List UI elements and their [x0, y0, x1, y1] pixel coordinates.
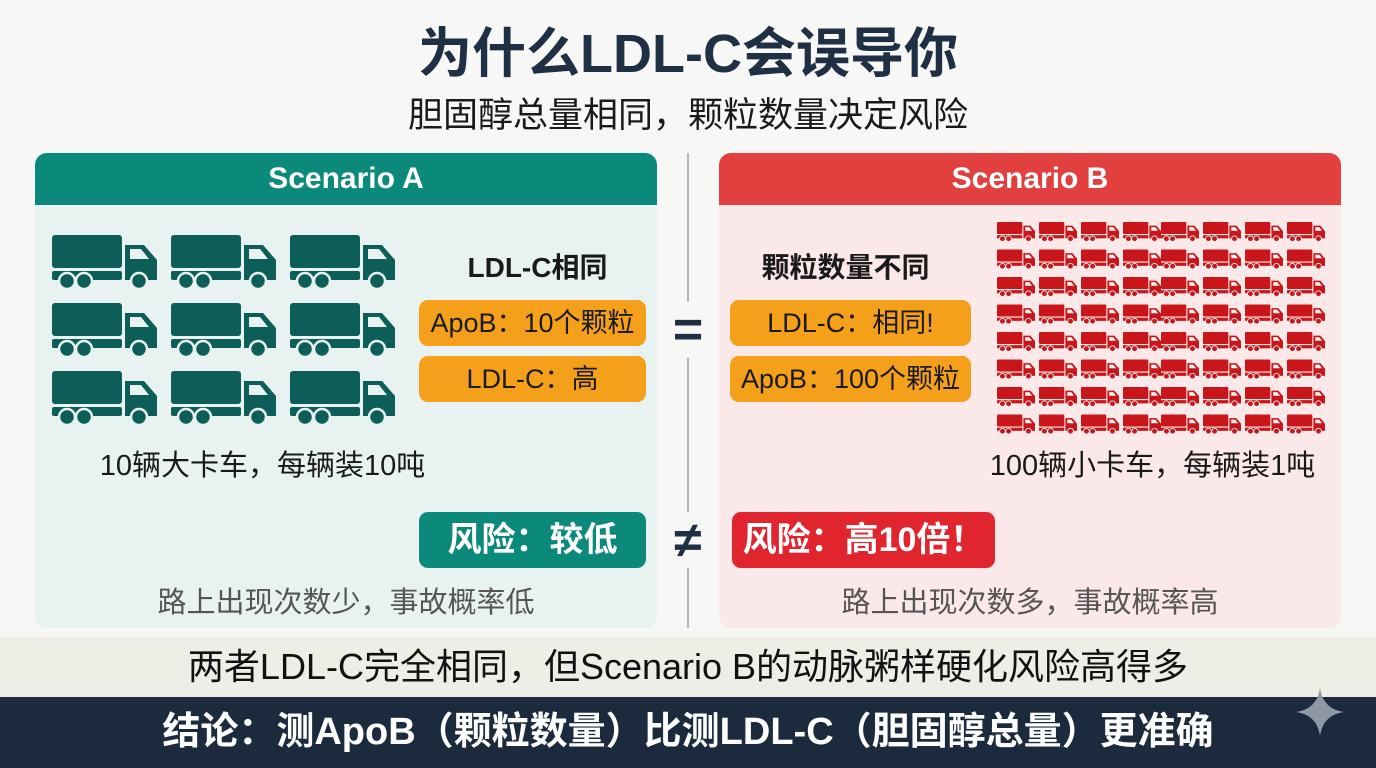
box: ApoB 10	[419, 300, 646, 346]
header: scenario B: Scenario B	[952, 162, 1108, 195]
subtitle: 胆固醇总量相同，颗粒数量决定风险	[408, 96, 968, 135]
icon: sparkle	[1296, 688, 1344, 736]
note B: 路上出现次数多，事故概率高	[841, 587, 1218, 619]
equals sign: =	[673, 301, 703, 359]
not equal sign: ≠	[674, 512, 702, 568]
icon grid: 64 small red trucks	[997, 222, 1325, 434]
box: LDL-C same	[730, 300, 971, 346]
caption B: 100辆小卡车，每辆装1吨	[990, 450, 1315, 482]
risk box A	[419, 512, 646, 568]
summary band	[0, 637, 1376, 697]
title: 为什么LDL-C会误导你	[418, 24, 958, 84]
box: ApoB 10: ApoB：10个颗粒	[430, 308, 635, 338]
note A: 路上出现次数少，事故概率低	[157, 587, 534, 619]
heading: LDL-C相同: LDL-C相同	[468, 252, 607, 283]
caption A: 10辆大卡车，每辆装10吨	[100, 450, 425, 482]
not equal sign	[663, 512, 713, 568]
conclusion footer	[0, 697, 1376, 768]
risk box B: 风险：高10倍！	[743, 521, 984, 559]
icon grid: 9 big trucks	[52, 235, 395, 424]
summary band: 两者LDL-C完全相同，但Scenario B的动脉粥样硬化风险高得多	[188, 646, 1188, 687]
box: LDL-C high: LDL-C：高	[466, 364, 599, 394]
panel: scenario B	[719, 153, 1341, 628]
box: ApoB 100	[730, 356, 971, 402]
header: scenario A: Scenario A	[268, 162, 424, 195]
heading: 颗粒数量不同: 颗粒数量不同	[761, 252, 930, 283]
header: scenario A	[35, 153, 657, 205]
box: LDL-C same: LDL-C：相同!	[767, 308, 934, 338]
conclusion footer: 结论：测ApoB（颗粒数量）比测LDL-C（胆固醇总量）更准确	[162, 711, 1214, 753]
divider	[687, 153, 689, 628]
header: scenario B	[719, 153, 1341, 205]
risk box B	[732, 512, 995, 568]
equals sign	[663, 302, 713, 358]
panel: scenario A	[35, 153, 657, 628]
risk box A: 风险：较低	[448, 521, 618, 559]
box: ApoB 100: ApoB：100个颗粒	[741, 364, 960, 394]
box: LDL-C high	[419, 356, 646, 402]
